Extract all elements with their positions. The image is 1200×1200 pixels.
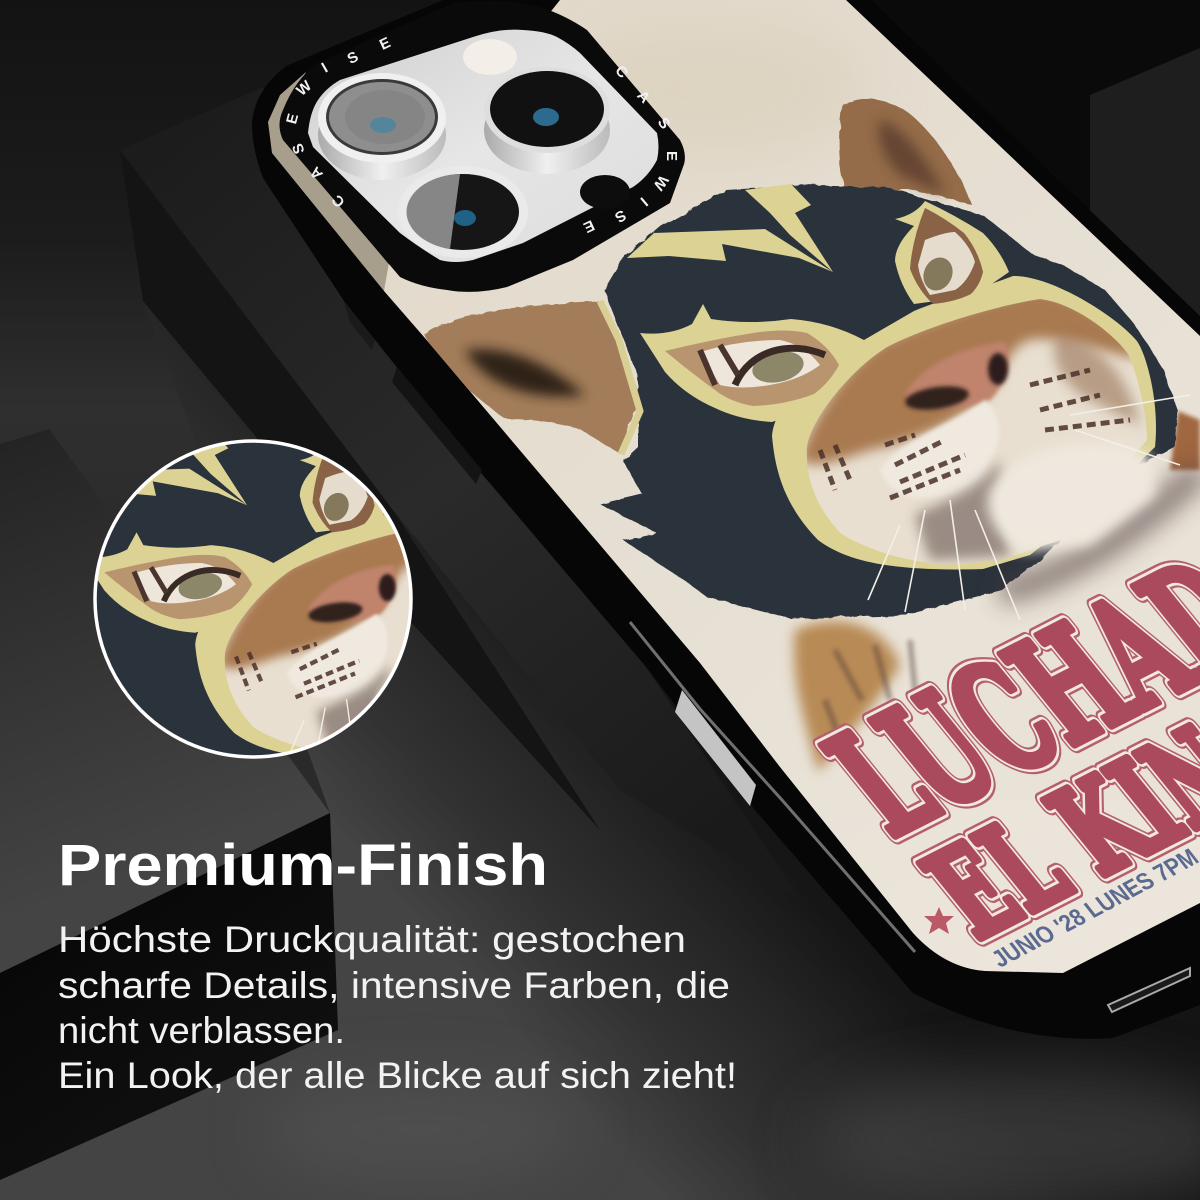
lens: left bbox=[318, 73, 446, 180]
ring lettering CASEWISE: W bbox=[293, 77, 316, 100]
microphone hole bbox=[580, 175, 630, 209]
ring lettering CASEWISE: S bbox=[344, 48, 361, 68]
heading: Premium-Finish bbox=[58, 833, 548, 898]
tan sliver beside the island bbox=[268, 72, 402, 291]
tiger wrestler illustration bbox=[424, 99, 1200, 800]
ring lettering CASEWISE: C bbox=[328, 191, 349, 211]
bottom port bbox=[1108, 968, 1190, 1012]
body text bbox=[58, 919, 737, 1096]
poster subtitle: JUNIO '28 LUNES 7PM bbox=[986, 844, 1200, 972]
ring lettering CASEWISE: E bbox=[663, 151, 680, 161]
ring lettering CASEWISE: A bbox=[306, 163, 327, 183]
ring lettering CASEWISE: E bbox=[581, 216, 597, 236]
ring lettering CASEWISE: S bbox=[654, 114, 674, 132]
ring lettering CASEWISE: E bbox=[377, 34, 393, 54]
flash bbox=[463, 39, 517, 75]
ring lettering CASEWISE bbox=[283, 34, 680, 236]
block: left lower block bbox=[0, 429, 338, 1180]
ring lettering CASEWISE: W bbox=[649, 172, 672, 194]
body text: nicht verblassen. bbox=[58, 1010, 345, 1051]
side button: silver bbox=[675, 690, 756, 806]
ring lettering CASEWISE: S bbox=[612, 206, 629, 226]
lens: right bbox=[484, 67, 610, 174]
camera glass bbox=[308, 30, 658, 262]
poster title bbox=[812, 560, 1200, 947]
phone back print bbox=[384, 0, 1200, 973]
side button: volume bbox=[392, 367, 482, 484]
star bbox=[924, 907, 954, 934]
body text: Höchste Druckqualität: gestochen bbox=[58, 919, 686, 960]
wall: lit surface right of the lower block bbox=[0, 301, 1200, 1200]
magnifier circle bbox=[93, 439, 413, 759]
ring lettering CASEWISE: A bbox=[633, 87, 653, 107]
slab: main platform bbox=[120, 87, 800, 900]
ring lettering CASEWISE: I bbox=[637, 194, 651, 209]
body text: Ein Look, der alle Blicke auf sich zieht! bbox=[58, 1055, 737, 1096]
ring lettering CASEWISE: I bbox=[319, 60, 331, 77]
side button: upper bbox=[344, 301, 375, 350]
ring lettering CASEWISE: E bbox=[283, 112, 302, 126]
lens: bottom bbox=[398, 166, 528, 258]
ring lettering CASEWISE: S bbox=[289, 141, 308, 156]
ring lettering CASEWISE: C bbox=[611, 62, 631, 82]
glossy highlight bbox=[630, 622, 915, 952]
body text: scharfe Details, intensive Farben, die bbox=[58, 965, 730, 1006]
camera island bbox=[280, 1, 685, 292]
phone body bbox=[252, 0, 1200, 1039]
